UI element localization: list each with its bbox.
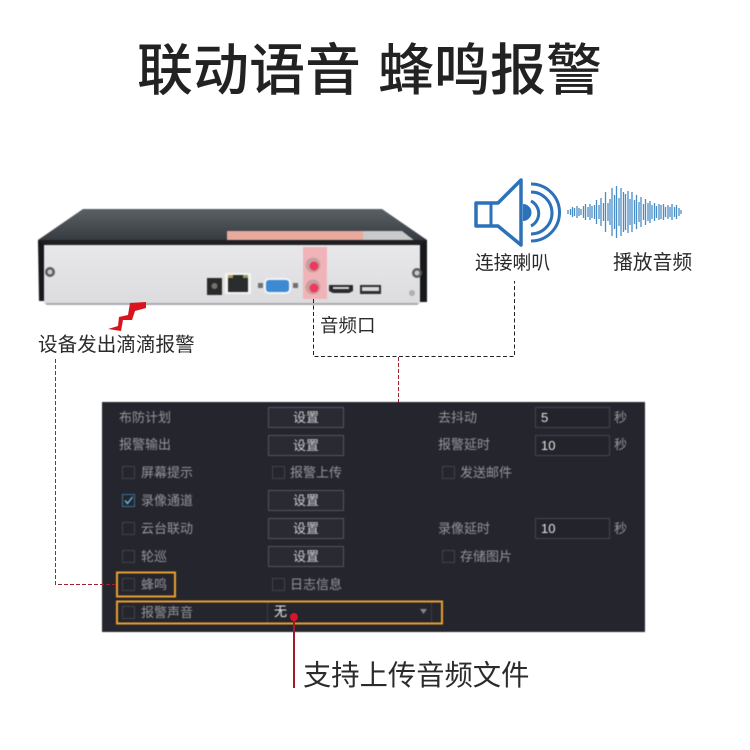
left column labels [119, 410, 342, 620]
hdmi port [329, 285, 353, 293]
highlight: alarm sound [117, 602, 442, 624]
alarm sound dropdown [268, 602, 432, 623]
connector: device alarm to buzzer [56, 359, 116, 584]
settings buttons: 设置 [293, 438, 319, 453]
settings buttons [268, 408, 344, 566]
left column labels: 蜂鸣 [141, 577, 167, 592]
left column labels: 报警声音 [141, 605, 193, 620]
left column labels: 日志信息 [290, 577, 342, 592]
label: connect speaker: 连接喇叭 [475, 252, 550, 273]
audio highlight [303, 247, 327, 299]
power port [207, 278, 222, 295]
device sticker [227, 231, 363, 241]
icon: speaker [476, 180, 560, 245]
checked checkbox [122, 494, 134, 506]
device: recorder rear view [38, 209, 427, 305]
left column labels: 报警输出 [119, 437, 171, 452]
network port [225, 273, 251, 294]
pointer: upload audio file [290, 613, 298, 688]
left column labels: 屏幕提示 [141, 465, 193, 480]
connector: audio port to speaker [314, 281, 514, 356]
label: device alarm: 设备发出滴滴报警 [38, 334, 195, 356]
device top surface [38, 209, 427, 240]
label: play audio: 播放音频 [613, 252, 692, 274]
right column labels: 存储图片 [460, 549, 512, 564]
caption: upload audio file: 支持上传音频文件 [303, 659, 529, 691]
left column labels: 报警上传 [290, 465, 342, 480]
icon: red zigzag alarm [108, 302, 146, 331]
value inputs [536, 408, 610, 538]
device front panel [44, 245, 420, 304]
value inputs: 5 [541, 410, 548, 425]
value inputs: 10 [541, 438, 555, 453]
value inputs: 10 [541, 521, 555, 536]
title: 蜂鸣报警 [378, 39, 602, 102]
panel: alarm settings [102, 402, 645, 632]
settings buttons: 设置 [293, 493, 319, 508]
left column labels: 布防计划 [119, 410, 171, 425]
highlight: buzzer [117, 572, 175, 596]
settings buttons: 设置 [293, 521, 319, 536]
title: 联动语音 [137, 39, 361, 102]
settings buttons: 设置 [293, 410, 319, 425]
icon: sound waveform [568, 186, 681, 238]
usb port [360, 285, 381, 294]
right column labels: 秒 [614, 521, 627, 536]
left column labels: 轮巡 [141, 549, 167, 564]
label: audio port: 音频口 [320, 315, 376, 336]
alarm sound dropdown: 无 [274, 604, 287, 619]
connector: audio line to alarm sound [398, 357, 400, 601]
left column labels: 录像通道 [141, 493, 193, 508]
vga port [258, 278, 298, 294]
title [137, 39, 602, 102]
audio ports [306, 258, 320, 294]
right column labels: 报警延时 [438, 437, 490, 452]
right column labels: 秒 [614, 437, 627, 452]
right column labels [438, 410, 627, 564]
left column labels: 云台联动 [141, 521, 193, 536]
checkboxes [122, 466, 454, 618]
right column labels: 秒 [614, 410, 627, 425]
right column labels: 发送邮件 [460, 465, 512, 480]
right column labels: 录像延时 [438, 521, 490, 536]
settings buttons: 设置 [293, 549, 319, 564]
right column labels: 去抖动 [438, 410, 477, 425]
